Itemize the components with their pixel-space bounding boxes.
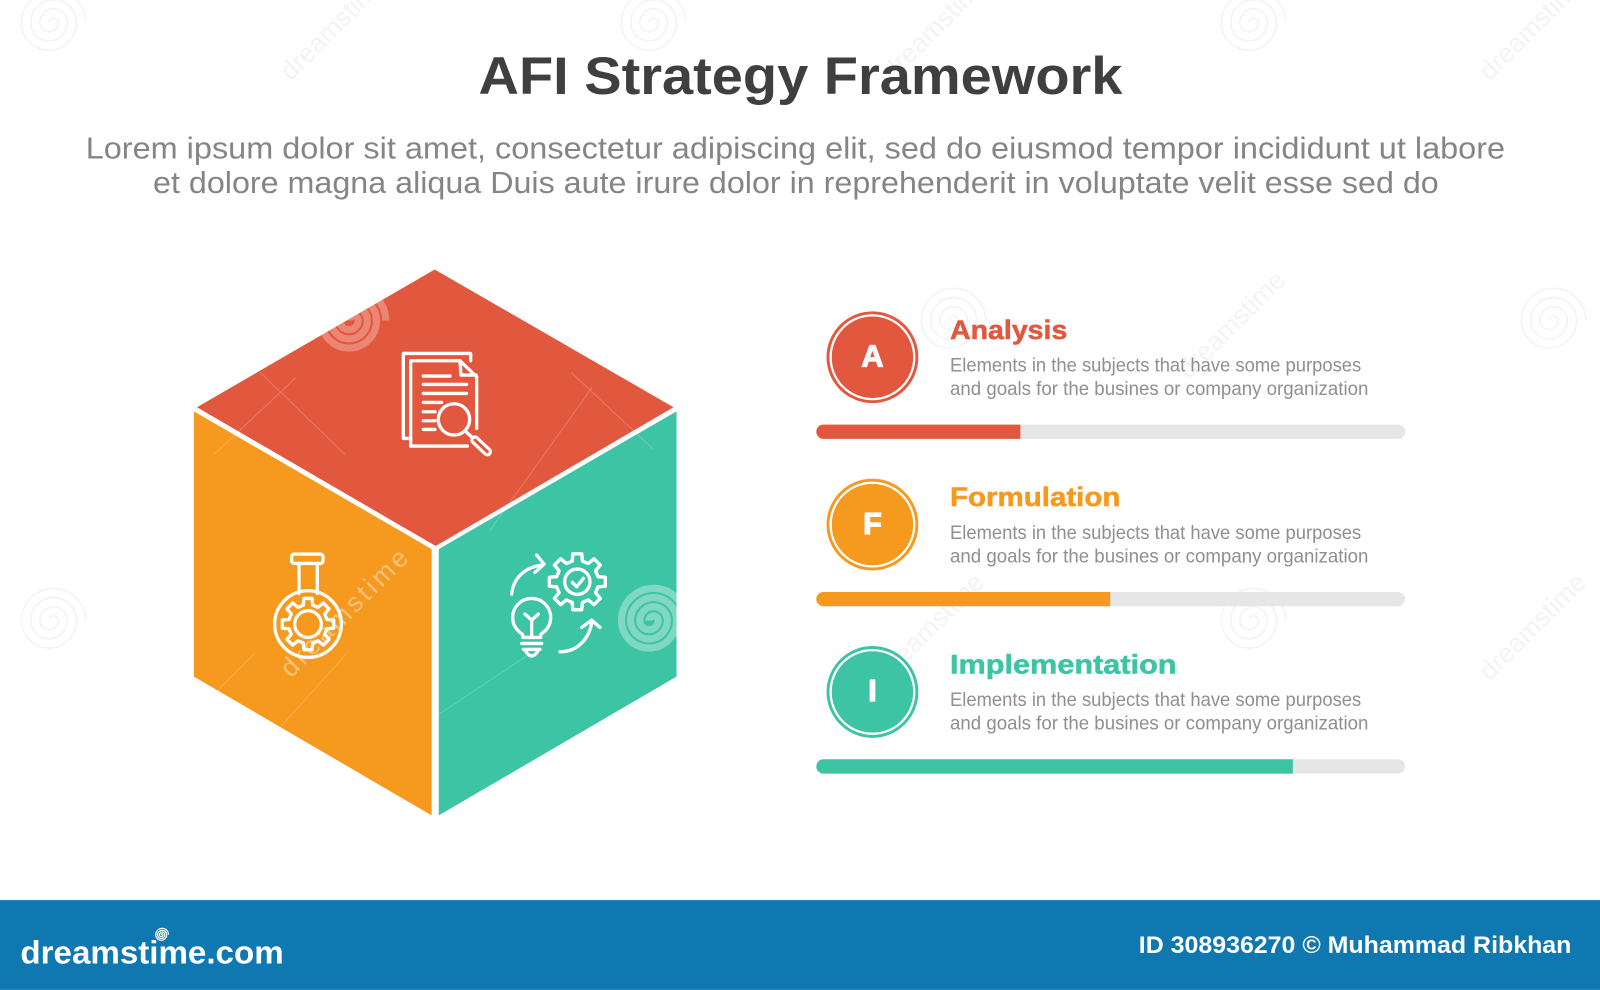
- icon: document with magnifier: [403, 353, 487, 452]
- badge A: A: [861, 339, 884, 373]
- description: [950, 355, 1368, 400]
- heading Analysis: Analysis: [950, 315, 1067, 345]
- description: and goals for the busines or company organization: [950, 545, 1368, 567]
- progress bar: [816, 425, 1405, 439]
- icon: idea and gear cycle: [512, 554, 605, 656]
- badge I: I: [868, 674, 877, 708]
- icon: flask with gear: [275, 554, 341, 657]
- footer logo: dreamstime.com: [20, 933, 284, 970]
- badge F: F: [863, 507, 882, 541]
- cube face: right green: [439, 411, 677, 815]
- progress bar: [816, 592, 1405, 606]
- cube face: left orange: [194, 411, 432, 815]
- item: Implementation: [816, 646, 1405, 774]
- badge I: [827, 646, 918, 738]
- footer bar: [0, 900, 1600, 990]
- badge A: [827, 311, 918, 403]
- description: Elements in the subjects that have some purposes: [950, 689, 1361, 711]
- faint watermark on background: dreamstime: [1473, 567, 1592, 686]
- watermark on cube: [194, 288, 686, 776]
- description: and goals for the busines or company organization: [950, 378, 1368, 400]
- item: Formulation: [816, 479, 1405, 606]
- faint watermark on background: dreamstime: [871, 567, 990, 686]
- item: Analysis: [816, 311, 1405, 439]
- subtitle text: et dolore magna aliqua Duis aute irure dolor in reprehenderit in voluptate velit esse sed do: [153, 167, 1439, 200]
- cube diagram: [194, 269, 686, 815]
- description: and goals for the busines or company organization: [950, 713, 1368, 735]
- subtitle text: Lorem ipsum dolor sit amet, consectetur adipiscing elit, sed do eiusmod tempor incididunt ut labore: [86, 132, 1505, 165]
- description: Elements in the subjects that have some purposes: [950, 355, 1361, 377]
- faint watermark on background: dreamstime: [1172, 265, 1291, 384]
- heading Implementation: Implementation: [950, 650, 1177, 680]
- title: AFI Strategy Framework: [479, 47, 1123, 106]
- cube face: top red: [197, 269, 673, 546]
- description: [950, 522, 1368, 567]
- faint watermark on background: [21, 0, 1592, 686]
- heading Formulation: Formulation: [950, 482, 1120, 512]
- badge F: [827, 479, 918, 571]
- subtitle text: [86, 132, 1505, 200]
- progress bar: [816, 759, 1405, 774]
- description: Elements in the subjects that have some purposes: [950, 522, 1361, 544]
- footer credit: ID 308936270 © Muhammad Ribkhan: [1139, 932, 1571, 959]
- watermark on cube: dreamstime: [274, 543, 414, 683]
- description: [950, 689, 1368, 735]
